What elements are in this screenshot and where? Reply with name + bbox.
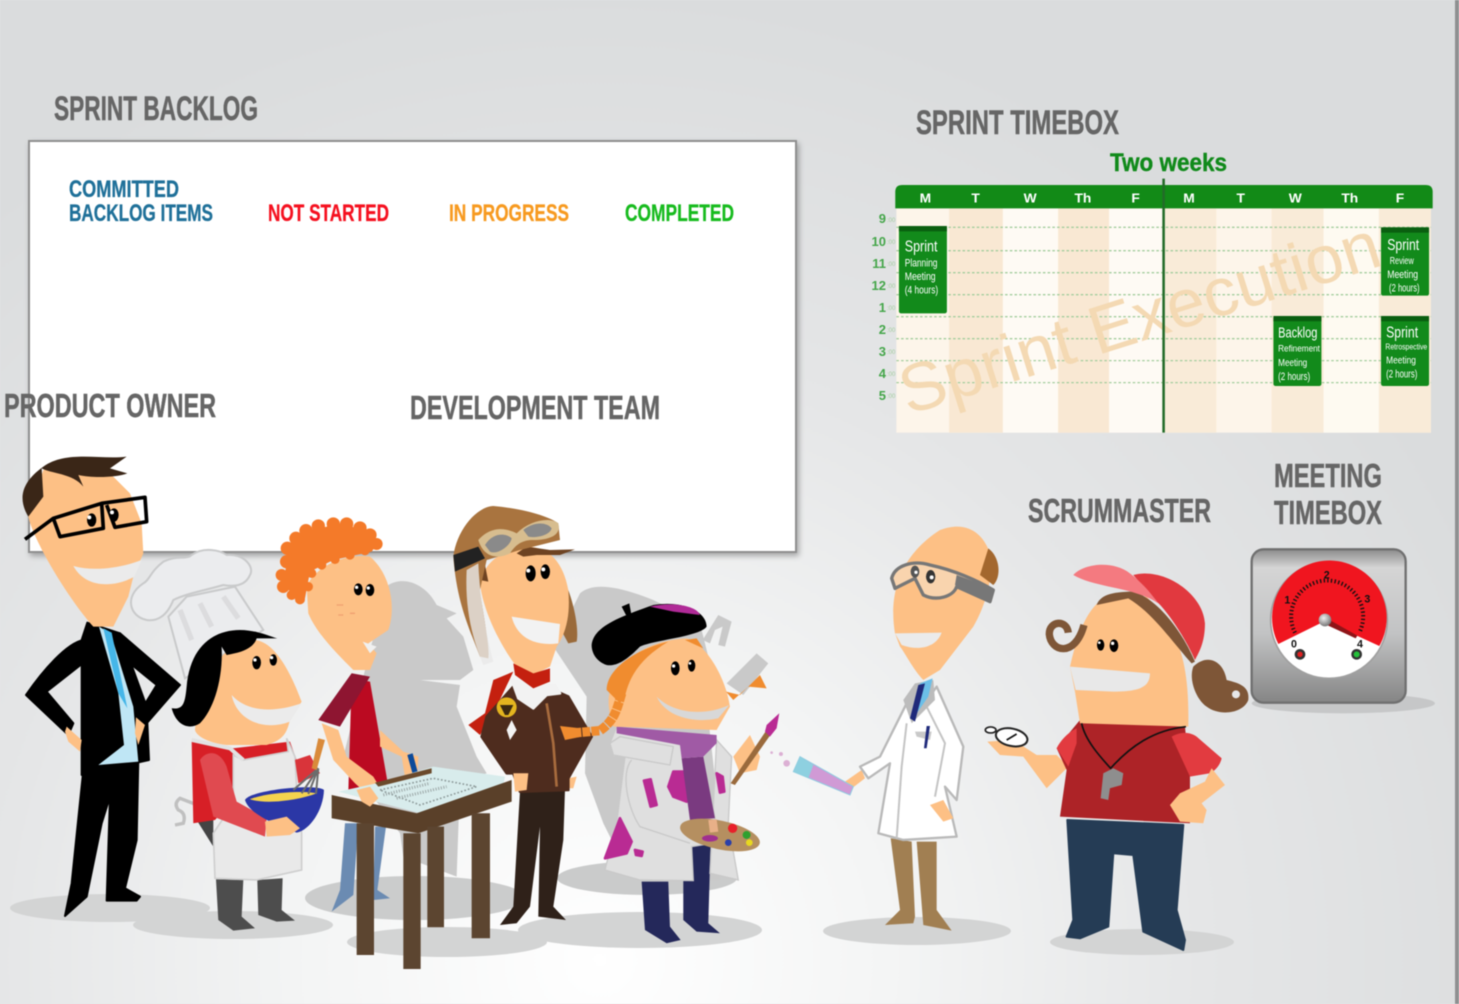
calendar hour labels: 2: [879, 322, 886, 337]
character: chef: [131, 550, 325, 931]
apron ties: [175, 798, 210, 825]
sprint retrospective meeting block: Retrospective: [1385, 342, 1428, 351]
sprint timebox heading: SPRINT TIMEBOX: [916, 104, 1119, 142]
right arm and hand: [1170, 768, 1225, 823]
calendar hour labels: 3: [879, 344, 886, 359]
painter scarf: [617, 727, 717, 820]
sleeve: [200, 753, 267, 837]
column heading: in progress: IN PROGRESS: [449, 200, 569, 227]
sprint retrospective meeting block: Meeting: [1386, 356, 1416, 366]
scrummaster heading: SCRUMMASTER: [1028, 492, 1211, 529]
icon: meeting timer gauge: [1252, 549, 1435, 713]
sprint planning meeting block: (4 hours): [905, 285, 938, 296]
column heading: completed: COMPLETED: [625, 200, 734, 227]
chart: sprint timebox calendar: :00: [887, 240, 896, 246]
icon: meeting timer gauge: 4: [1357, 638, 1363, 650]
backlog refinement meeting block: Backlog: [1278, 325, 1317, 341]
calendar header: days: Th: [1074, 191, 1091, 205]
cap: [1073, 565, 1205, 660]
calendar header: days: M: [920, 191, 931, 205]
panel: sprint backlog board: [29, 141, 796, 552]
calendar header: days: M: [1183, 191, 1195, 205]
backlog refinement meeting block: (2 hours): [1278, 371, 1310, 383]
calendar header: days: F: [1131, 191, 1140, 205]
test tube: [783, 757, 853, 795]
character: product owner: [23, 457, 180, 916]
calendar hour labels: 12: [872, 278, 886, 293]
column heading: committed backlog items: BACKLOG ITEMS: [69, 200, 213, 227]
stopwatch: [985, 726, 1029, 749]
product owner heading: PRODUCT OWNER: [4, 387, 216, 424]
calendar hour labels: 11: [872, 256, 886, 271]
backlog refinement meeting block: [1273, 316, 1321, 386]
sprint planning meeting block: [899, 226, 947, 313]
chart: sprint timebox calendar: :00: [887, 328, 896, 334]
sprint review meeting block: Review: [1390, 256, 1414, 267]
development team heading: DEVELOPMENT TEAM: [410, 389, 660, 426]
character: scientist: [783, 527, 999, 931]
sprint retrospective meeting block: (2 hours): [1386, 369, 1418, 380]
character: red haired developer: [276, 517, 422, 912]
character: pilot: [453, 506, 592, 925]
column heading: committed backlog items: COMMITTED: [69, 176, 179, 203]
watermark: sprint execution: Sprint Execution: [890, 206, 1389, 429]
safety goggles: [892, 563, 993, 602]
sleeves: [1057, 728, 1222, 777]
icon: meeting timer gauge: 0: [1291, 638, 1297, 650]
sprint retrospective meeting block: Sprint: [1386, 324, 1419, 341]
calendar header: days: [895, 185, 1433, 208]
calendar hour labels: 10: [872, 234, 886, 249]
chart: sprint timebox calendar: :00: [887, 262, 896, 268]
chart: sprint timebox calendar: :00: [887, 306, 896, 312]
calendar header: days: F: [1396, 191, 1404, 205]
sprint review meeting block: [1381, 227, 1429, 296]
apron: [192, 738, 302, 880]
calendar header: days: T: [971, 191, 980, 205]
painter braids: [560, 675, 767, 740]
chart: sprint timebox calendar: :00: [887, 218, 896, 224]
icon: meeting timer gauge: 1: [1284, 594, 1290, 606]
floor shadows: [10, 861, 1234, 957]
scarf and fur collar: [512, 663, 560, 708]
sprint planning meeting block: Planning: [905, 258, 937, 270]
column heading: not started: NOT STARTED: [268, 200, 389, 227]
calendar header: days: W: [1024, 191, 1037, 205]
sprint retrospective meeting block: [1381, 316, 1429, 386]
two weeks label: Two weeks: [1110, 149, 1227, 177]
mixing bowl: [245, 738, 325, 833]
calendar hour labels: 1: [879, 300, 886, 315]
icon: meeting timer gauge: 2: [1324, 569, 1330, 581]
icon: meeting timer gauge: 3: [1364, 594, 1370, 606]
chart: sprint timebox calendar: [872, 179, 1433, 433]
drawing table with blueprint: [332, 767, 512, 969]
character: scrum master: [985, 565, 1248, 950]
lab coat: [860, 678, 963, 840]
backlog refinement meeting block: Meeting: [1278, 358, 1307, 369]
calendar hour labels: [872, 211, 887, 403]
badge: [497, 697, 517, 717]
sprint backlog heading: SPRINT BACKLOG: [54, 90, 258, 128]
chart: sprint timebox calendar: :00: [887, 350, 896, 356]
sprint planning meeting block: Sprint: [905, 238, 938, 255]
calendar header: days: T: [1236, 191, 1245, 205]
palette: [677, 812, 763, 857]
chef hat: [131, 550, 263, 678]
whistle on lanyard: [1082, 723, 1186, 800]
sprint review meeting block: (2 hours): [1389, 283, 1420, 295]
paint drops: [770, 751, 790, 766]
meeting timebox heading: TIMEBOX: [1274, 494, 1382, 531]
curly hair: [276, 517, 383, 604]
backlog refinement meeting block: Refinement: [1278, 344, 1320, 354]
ghost silhouettes of team: [343, 581, 768, 880]
calendar hour labels: 5: [879, 388, 886, 403]
sprint review meeting block: Sprint: [1387, 237, 1420, 254]
calendar hour labels: 4: [879, 366, 887, 381]
painter coat: [605, 727, 738, 881]
sprint planning meeting block: Meeting: [905, 271, 936, 283]
ponytail: [1192, 660, 1248, 712]
chart: sprint timebox calendar: :00: [887, 284, 896, 290]
meeting timebox heading: MEETING: [1274, 457, 1382, 494]
sprint review meeting block: Meeting: [1387, 269, 1418, 281]
goggles: [478, 520, 559, 557]
calendar header: days: Th: [1341, 191, 1358, 205]
calendar header: days: W: [1289, 191, 1302, 205]
chart: sprint timebox calendar: :00: [887, 394, 896, 400]
calendar hour labels: 9: [879, 211, 886, 226]
suit: [26, 623, 180, 916]
chart: sprint timebox calendar: :00: [887, 372, 896, 378]
character: painter: [560, 603, 790, 943]
